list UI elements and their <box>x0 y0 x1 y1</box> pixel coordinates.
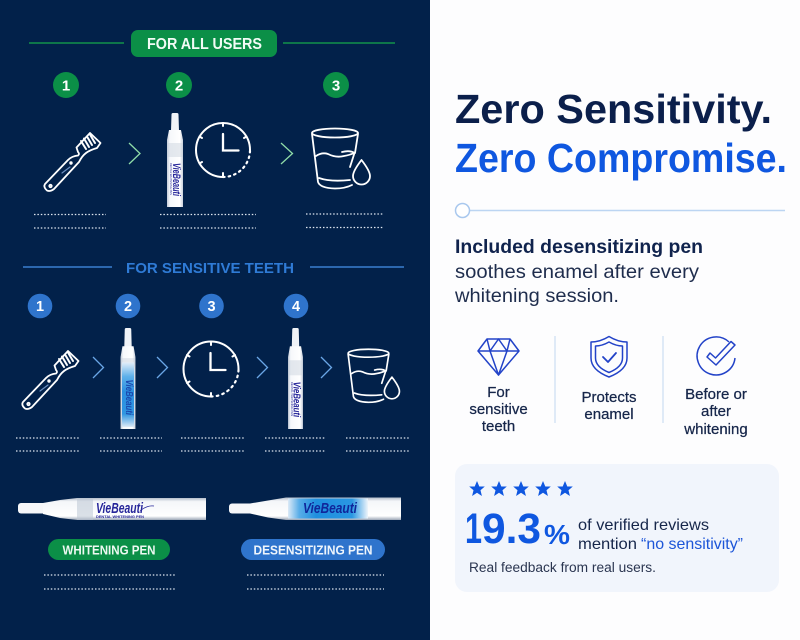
arrow <box>257 357 268 378</box>
step number 1 green <box>53 72 79 98</box>
description <box>454 236 703 307</box>
placeholder text lines: step 1 <box>34 214 106 228</box>
step number 3 green: 3 <box>332 78 340 94</box>
product: desensitizing pen horizontal: VieBeauti <box>303 500 358 517</box>
statistic caption: of verified reviews <box>578 517 709 534</box>
icon: glass with drop <box>312 128 370 188</box>
label pill: whitening pen: WHITENING PEN <box>62 542 156 558</box>
icon: clock <box>183 342 238 396</box>
placeholder text lines: sensitive step 2 <box>100 438 162 451</box>
product: whitening pen horizontal <box>18 498 206 520</box>
panel: usage steps <box>0 0 430 640</box>
product: desensitizing pen vertical <box>121 328 135 429</box>
icon: check circle <box>697 337 735 375</box>
placeholder text lines: sensitive step 3 <box>181 438 244 451</box>
product: desensitizing pen horizontal <box>229 498 401 520</box>
benefit: protects enamel: enamel <box>584 406 634 423</box>
description: whitening session. <box>454 285 619 307</box>
placeholder text lines: whitening pen <box>44 575 175 589</box>
statistic caption: “no sensitivity” <box>641 536 743 553</box>
benefit: protects enamel: Protects <box>581 389 637 406</box>
product: whitening pen vertical: DENTAL WHITENING PEN <box>169 163 173 195</box>
arrow <box>281 143 292 164</box>
five stars <box>469 481 573 496</box>
benefit: for sensitive teeth: For <box>487 384 510 401</box>
section header: for all users <box>29 30 395 57</box>
statistic: 9.3 <box>482 505 541 553</box>
product: whitening pen vertical <box>288 328 303 429</box>
step number 1 blue: 1 <box>36 299 44 315</box>
placeholder text lines: sensitive step 5 <box>346 438 409 451</box>
benefit: for sensitive teeth <box>469 384 528 435</box>
product: whitening pen vertical: VieBeauti <box>291 382 302 418</box>
benefit: for sensitive teeth: teeth <box>482 418 515 435</box>
statistic: 1 <box>465 505 482 553</box>
timeline divider <box>456 204 785 218</box>
label pill: whitening pen <box>48 539 170 560</box>
product: whitening pen horizontal: DENTAL WHITENING PEN <box>96 515 144 519</box>
statistic caption: mention <box>578 536 637 553</box>
arrow <box>93 357 104 378</box>
description: Included desensitizing pen <box>455 236 703 258</box>
step number 1 green: 1 <box>62 78 70 94</box>
description: soothes enamel after every <box>455 261 699 283</box>
review card <box>455 464 779 592</box>
step number 2 green: 2 <box>175 78 183 94</box>
product: whitening pen vertical: DENTAL WHITENING PEN <box>290 382 294 416</box>
section header: for all users: FOR ALL USERS <box>147 36 262 53</box>
section header: for sensitive teeth: FOR SENSITIVE TEETH <box>126 260 294 277</box>
label pill: desensitizing pen <box>241 539 385 560</box>
benefit: protects enamel <box>581 389 637 423</box>
statistic caption <box>578 517 743 553</box>
product: whitening pen vertical: VieBeauti <box>170 163 182 197</box>
step number 3 blue <box>199 294 224 318</box>
icon: diamond <box>478 339 519 375</box>
headline: Zero Sensitivity. <box>455 86 772 132</box>
panel: benefits <box>430 0 800 640</box>
statistic <box>465 505 570 553</box>
card note: Real feedback from real users. <box>469 560 656 575</box>
placeholder text lines: step 3 <box>306 214 383 228</box>
product: whitening pen vertical <box>167 113 183 207</box>
icon: toothbrush <box>22 351 78 409</box>
product: whitening pen horizontal: VieBeauti <box>96 500 144 517</box>
placeholder text lines: step 2 <box>160 214 256 228</box>
placeholder text lines: desensitizing pen <box>247 575 384 589</box>
step number 2 green <box>166 72 192 98</box>
arrow <box>321 357 332 378</box>
product: desensitizing pen vertical: VieBeauti <box>123 380 134 416</box>
placeholder text lines: sensitive step 4 <box>265 438 325 451</box>
step number 2 blue: 2 <box>124 299 132 315</box>
step number 1 blue <box>28 294 52 318</box>
placeholder text lines: sensitive step 1 <box>16 438 79 451</box>
label pill: desensitizing pen: DESENSITIZING PEN <box>254 542 372 558</box>
benefit: before or after whitening <box>683 386 748 438</box>
icon: clock <box>196 123 250 177</box>
benefit: for sensitive teeth: sensitive <box>469 401 528 418</box>
arrow <box>157 357 168 378</box>
statistic: % <box>544 519 570 550</box>
benefit: before or after whitening: whitening <box>683 421 748 438</box>
step number 4 blue: 4 <box>292 299 300 315</box>
step number 3 blue: 3 <box>207 299 216 315</box>
headline <box>455 86 787 181</box>
step number 2 blue <box>116 294 140 318</box>
arrow <box>129 143 140 164</box>
benefit: before or after whitening: Before or <box>685 386 747 403</box>
benefit: before or after whitening: after <box>701 403 731 420</box>
step number 3 green <box>323 72 349 98</box>
icon: toothbrush <box>44 133 100 191</box>
icon: glass with drop <box>348 349 399 402</box>
step number 4 blue <box>284 294 308 318</box>
icon: shield with check <box>591 336 627 377</box>
